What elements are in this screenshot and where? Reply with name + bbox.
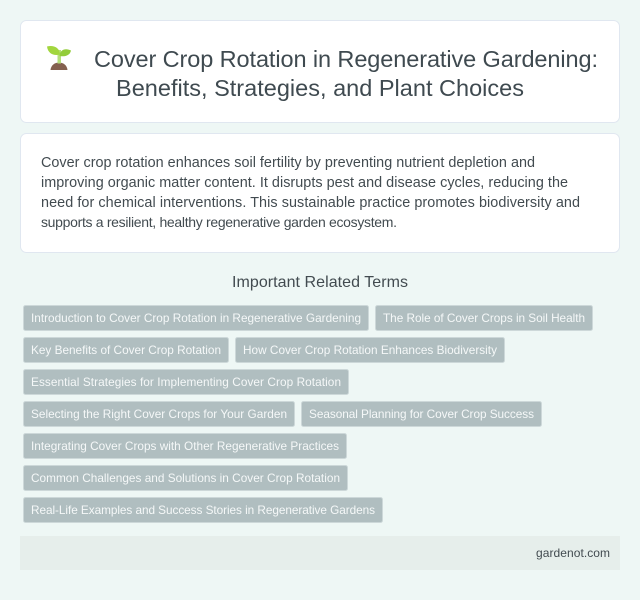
tag 1 [24,306,368,330]
tag 9: Common Challenges and Solutions in Cover Crop Rotation [31,471,340,485]
tag 2 [376,306,592,330]
tag 1: Introduction to Cover Crop Rotation in Regenerative Gardening [31,311,361,325]
tag 10: Real-Life Examples and Success Stories in Regenerative Gardens [31,503,375,517]
tag 3: Key Benefits of Cover Crop Rotation [31,343,221,357]
tag 6: Selecting the Right Cover Crops for Your Garden [31,407,287,421]
tag 2: The Role of Cover Crops in Soil Health [383,311,585,325]
tag 10 [24,498,382,522]
panel: summary [20,134,620,252]
text block: summary paragraph: need for chemical interventions. This sustainable practice promotes biodiversity and [41,195,580,211]
tag 3 [24,338,228,362]
tag 6 [24,402,294,426]
tag 9 [24,466,348,490]
footer source text: gardenot.com [536,546,610,560]
icon: seedling [47,46,71,70]
tag 7: Seasonal Planning for Cover Crop Success [309,407,534,421]
tag list [24,306,592,522]
footer [20,536,620,570]
heading: related terms: Important Related Terms [232,274,408,291]
panel: title card [20,20,620,122]
title: Cover Crop Rotation in Regenerative Gardening: [94,46,598,72]
text block: summary paragraph: Cover crop rotation enhances soil fertility by preventing nutrient depletion and [41,155,535,171]
tag 4 [236,338,504,362]
text block: summary paragraph [41,155,580,230]
title: Benefits, Strategies, and Plant Choices [116,75,524,101]
text block: summary paragraph: supports a resilient, healthy regenerative garden ecosystem. [41,214,397,230]
tag 8 [24,434,346,458]
tag 8: Integrating Cover Crops with Other Regenerative Practices [31,439,339,453]
text block: summary paragraph: improving organic matter content. It disrupts pest and disease cycles, reducing the [41,175,568,191]
tag 7 [302,402,542,426]
tag 4: How Cover Crop Rotation Enhances Biodiversity [243,343,497,357]
tag 5: Essential Strategies for Implementing Cover Crop Rotation [31,375,341,389]
title [94,46,598,101]
tag 5 [24,370,348,394]
